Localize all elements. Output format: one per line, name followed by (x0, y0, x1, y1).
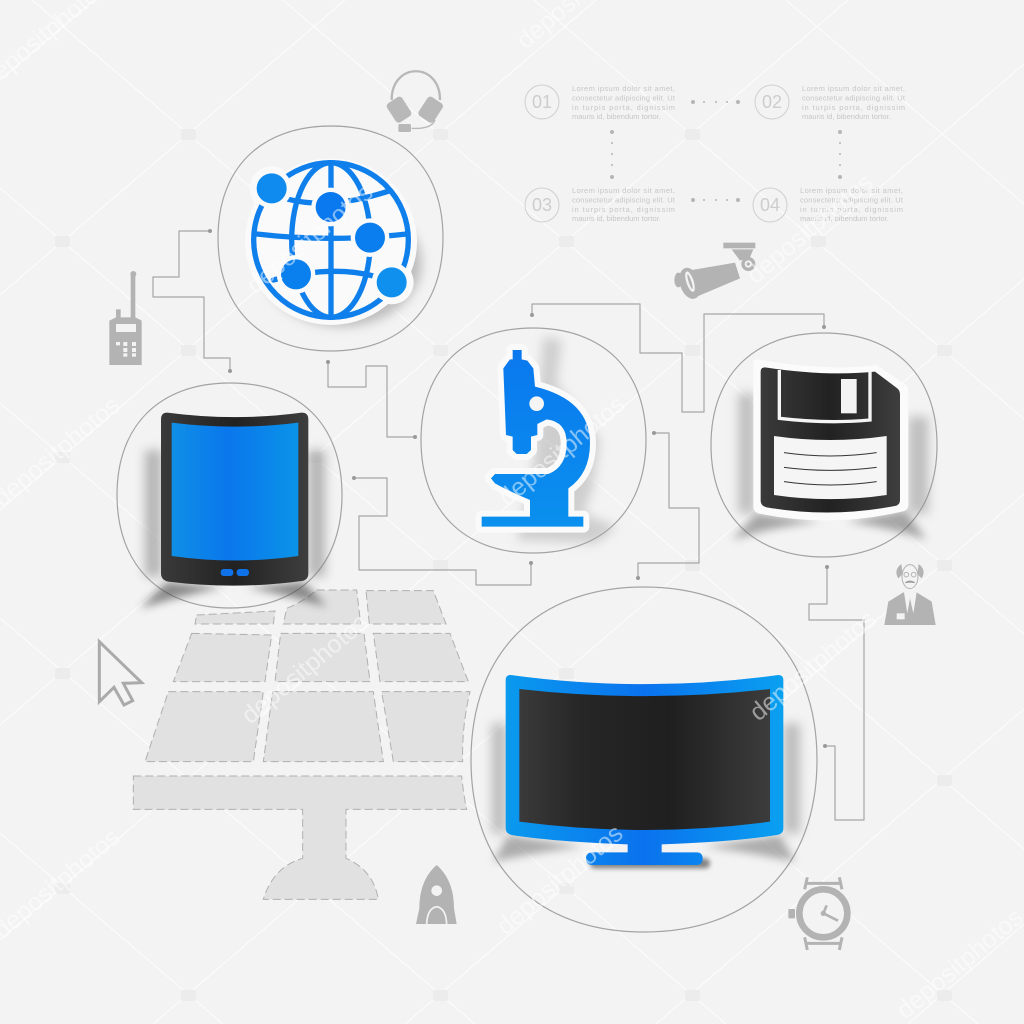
numbered text block legend: 02 (762, 92, 782, 112)
numbered text block legend: 01 (532, 92, 552, 112)
icon: headset (385, 71, 444, 132)
icon: microscope sticker (482, 337, 617, 543)
numbered text block legend: mauris id, bibendum tortor. (572, 214, 661, 223)
numbered text block legend (525, 84, 906, 223)
icon: cursor arrow (99, 642, 142, 705)
numbered text block legend: consectetur adipiscing elit. Ut (572, 196, 676, 204)
watermark text: depositphotos (744, 605, 881, 727)
numbered text block legend: 03 (532, 195, 552, 215)
numbered text block legend: consectetur adipiscing elit. Ut (572, 94, 676, 102)
panel: microscope (421, 328, 646, 553)
connector lines (153, 229, 864, 820)
icon: walkie talkie (109, 271, 142, 365)
icon: globe sticker (245, 158, 422, 327)
panel: tablet (117, 383, 342, 608)
icon: floppy sticker (732, 359, 928, 540)
icon: scientist (884, 564, 936, 625)
icon: tablet device (140, 413, 327, 608)
numbered text block legend: mauris id, bibendum tortor. (802, 112, 891, 121)
numbered text block legend: Lorem ipsum dolor sit amet, (572, 186, 675, 195)
icon: wristwatch (788, 877, 847, 950)
numbered text block legend: 04 (760, 195, 780, 215)
solar panel (133, 590, 470, 899)
numbered text block legend: Lorem ipsum dolor sit amet, (800, 186, 903, 195)
numbered text block legend: Lorem ipsum dolor sit amet, (572, 84, 675, 93)
panel: globe (218, 126, 443, 351)
numbered text block legend: in turpis porta, dignissim (572, 103, 675, 112)
watermark text: depositphotos (491, 819, 628, 941)
watermark text: depositphotos (241, 178, 378, 300)
watermark cameras (55, 129, 952, 1001)
numbered text block legend: Lorem ipsum dolor sit amet, (802, 84, 905, 93)
icon: curved monitor (492, 675, 800, 868)
watermark text: depositphotos (741, 168, 878, 290)
numbered text block legend: in turpis porta, dignissim (572, 205, 675, 214)
numbered text block legend: in turpis porta, dignissim (800, 205, 903, 214)
numbered text block legend: in turpis porta, dignissim (802, 103, 905, 112)
watermark text: depositphotos (493, 390, 630, 512)
numbered text block legend: mauris id, bibendum tortor. (800, 214, 889, 223)
icon: security camera (674, 243, 755, 302)
numbered text block legend: mauris id, bibendum tortor. (572, 112, 661, 121)
numbered text block legend: consectetur adipiscing elit. Ut (802, 94, 906, 102)
panel: floppy disk (711, 333, 937, 557)
watermark text: depositphotos (236, 608, 373, 730)
panel: monitor (471, 587, 817, 932)
numbered text block legend: consectetur adipiscing elit. Ut (800, 196, 904, 204)
icon: rocket (416, 865, 457, 924)
